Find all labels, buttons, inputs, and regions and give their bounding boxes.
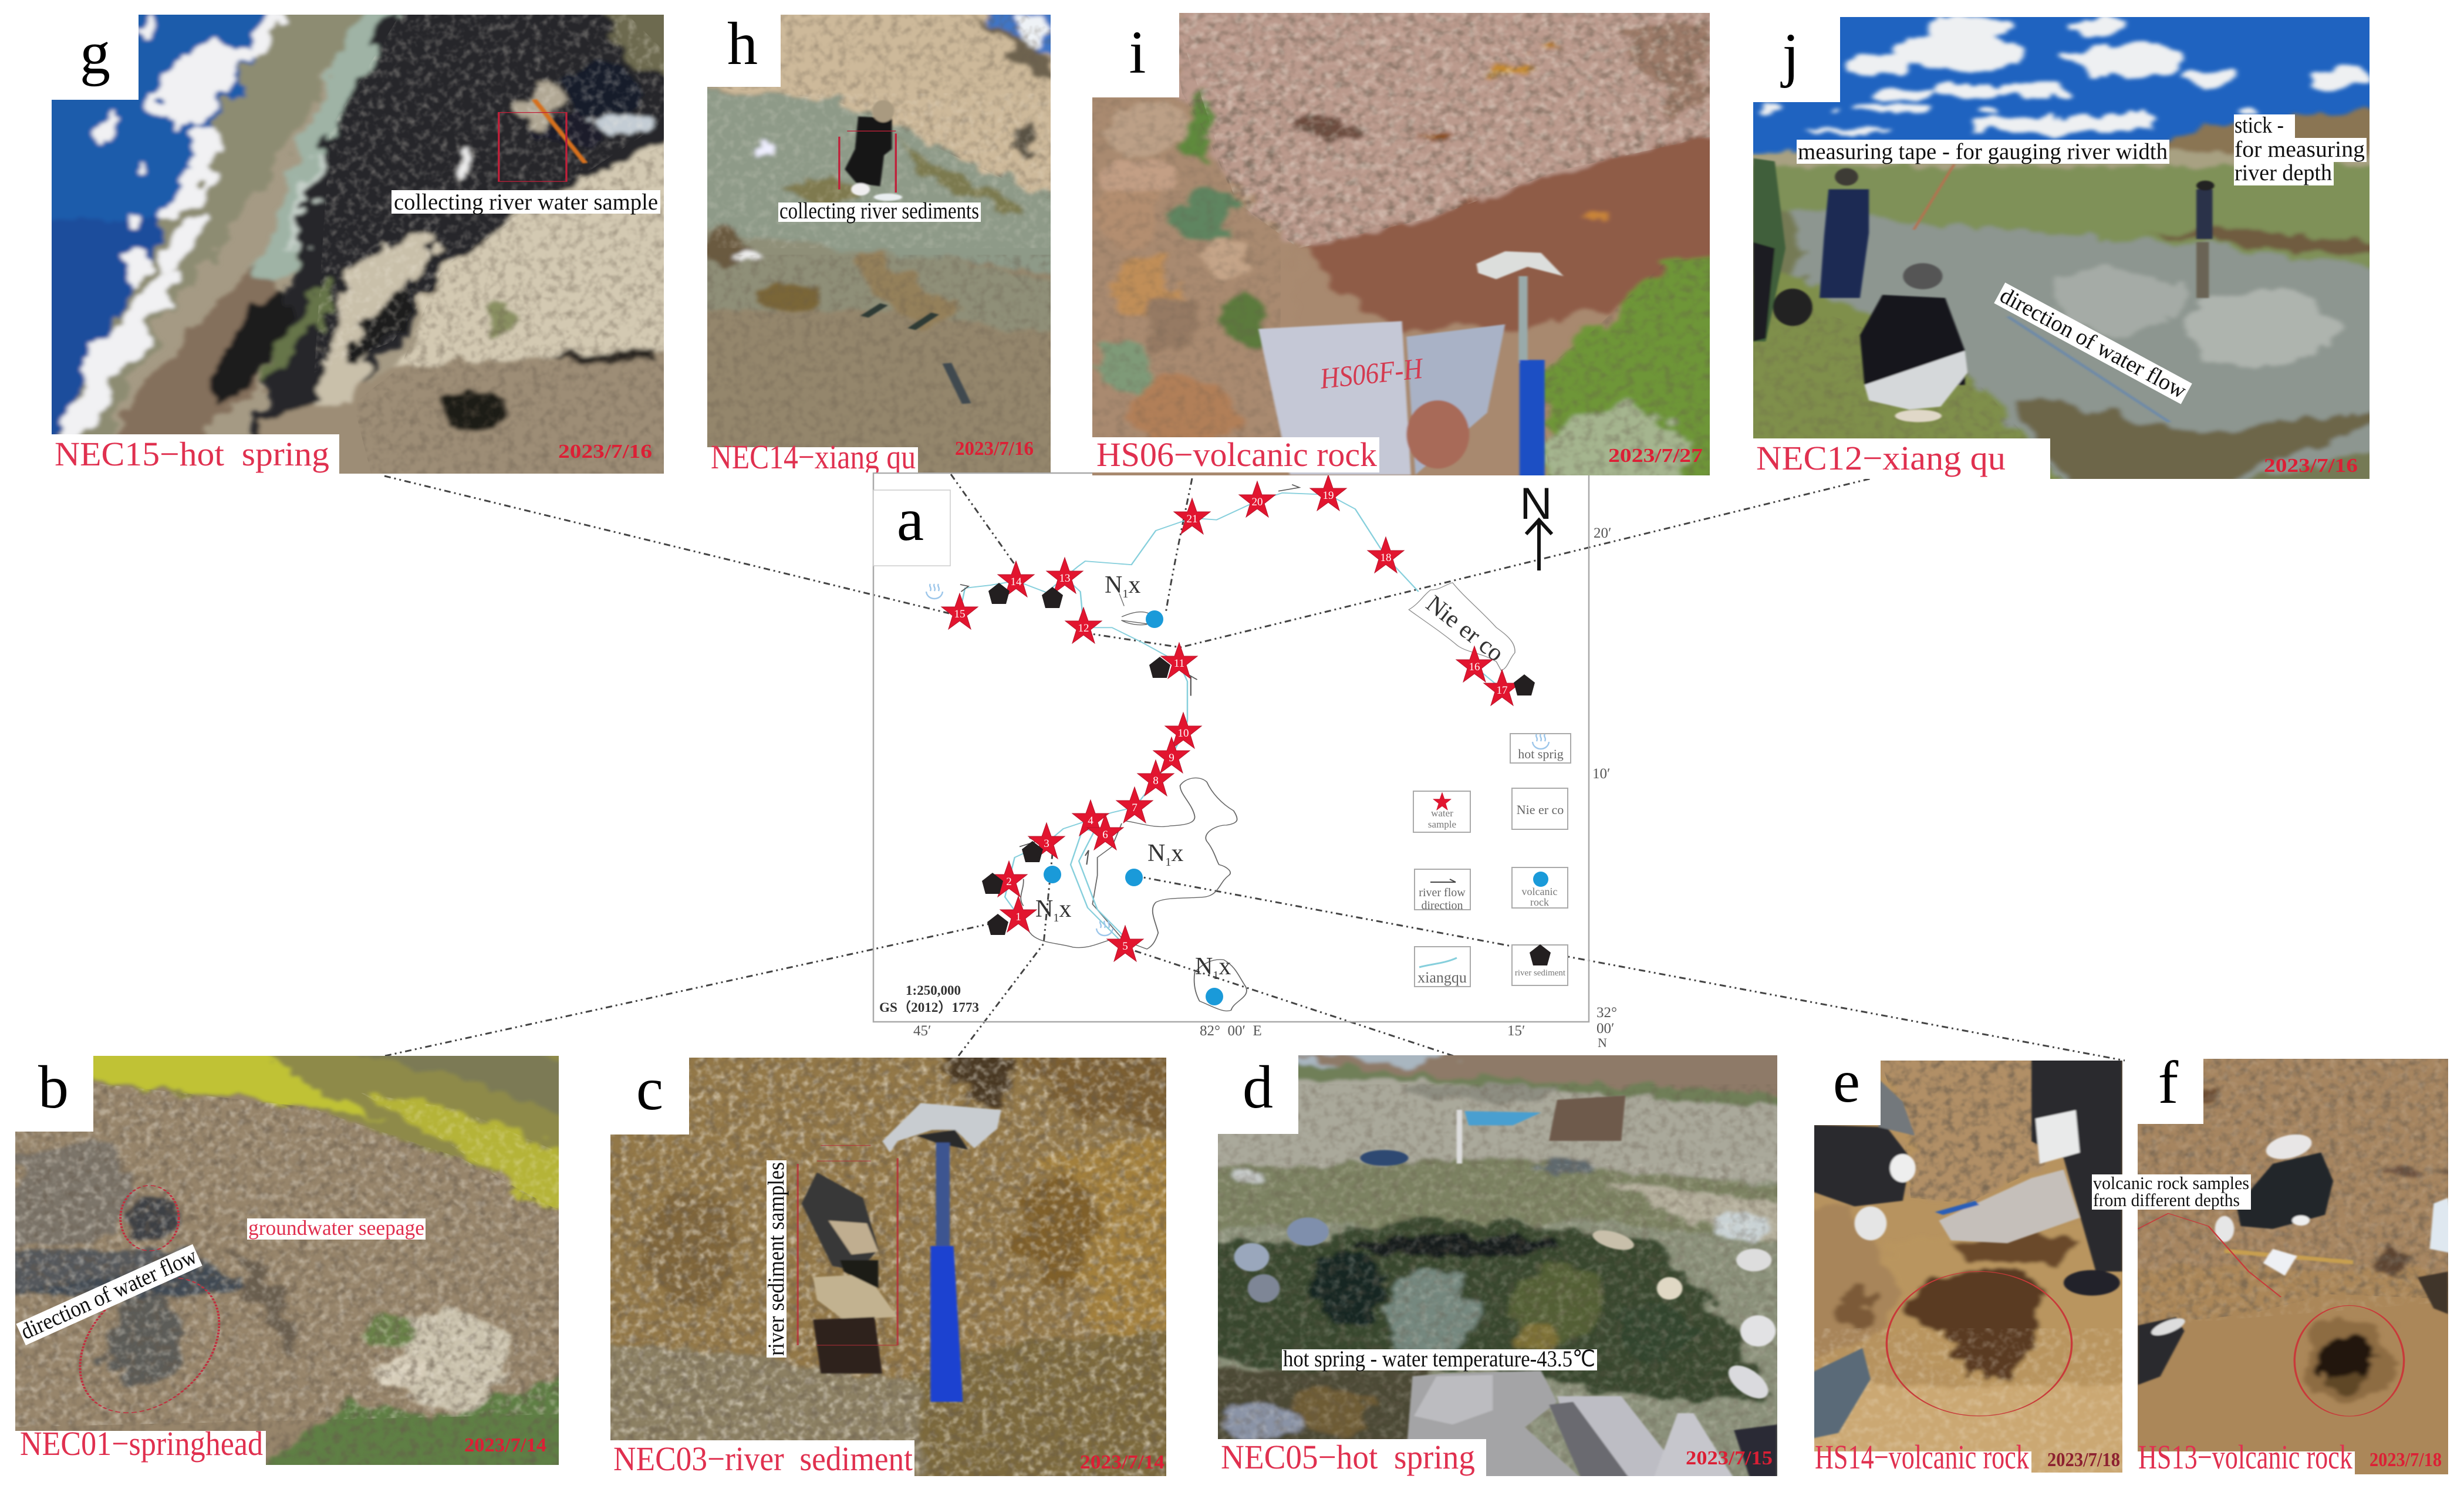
hot spring icons bbox=[926, 584, 1113, 936]
map text: N1x labels: x bbox=[1128, 572, 1140, 599]
photo: sampler beside dug pit bbox=[2104, 1039, 2464, 1487]
map text: N1x labels: N bbox=[1147, 840, 1165, 867]
legend: river sediment: river sediment bbox=[1515, 968, 1566, 978]
panel g: NEC15 hot spring photo bbox=[52, 15, 664, 474]
hammer bbox=[882, 1103, 1001, 1402]
sampling sites: water sample stars: 14 bbox=[1011, 576, 1022, 588]
sampling sites: water sample stars: 3 bbox=[1044, 838, 1049, 850]
sampling sites: water sample stars: 16 bbox=[1469, 661, 1480, 673]
legend: lake bbox=[1512, 788, 1568, 829]
river flow arrows bbox=[960, 485, 1299, 865]
map frame bbox=[873, 473, 1589, 1022]
legend: water sample: water bbox=[1431, 808, 1453, 819]
sampling sites: water sample stars: 18 bbox=[1380, 552, 1391, 564]
caption: HS06−volcanic rock bbox=[1096, 435, 1377, 474]
photo: people measuring river under blue sky bbox=[1753, 17, 2370, 479]
tent, flags and rocks bbox=[1234, 1096, 1777, 1478]
people bbox=[1753, 158, 2215, 422]
note: collecting river sediments: collecting river sediments bbox=[779, 198, 979, 224]
note: volcanic rock samples from different depths bbox=[2092, 1174, 2251, 1210]
legend: river sediment bbox=[1512, 944, 1568, 985]
legend: hot spring bbox=[1510, 734, 1571, 763]
map text: N1x labels: 1 bbox=[1122, 588, 1128, 600]
panel letter i bbox=[1092, 13, 1179, 97]
legend: volcanic rock bbox=[1512, 867, 1568, 908]
date: 2023/7/16 bbox=[955, 438, 1034, 460]
caption: NEC15−hot spring bbox=[55, 435, 329, 473]
lake label: Nie er co bbox=[1421, 590, 1508, 667]
north arrow bbox=[1520, 479, 1552, 570]
panel letter a bbox=[873, 486, 950, 566]
sampling sites: water sample stars: 19 bbox=[1323, 489, 1334, 502]
sampling sites: water sample stars: 13 bbox=[1059, 572, 1071, 585]
geology outlines and lake bbox=[1021, 583, 1515, 1011]
bags and hammer bbox=[1258, 251, 1564, 478]
note: measuring tape: measuring tape - for gauging river width bbox=[1798, 139, 2168, 164]
sampling sites: water sample stars: 9 bbox=[1169, 752, 1174, 764]
panel letter c bbox=[610, 1055, 689, 1135]
sampling sites: water sample stars: 10 bbox=[1177, 727, 1189, 740]
sediment sample rocks bbox=[802, 1173, 897, 1373]
handwritten bag label: HS06F-H bbox=[1318, 352, 1426, 395]
date: 2023/7/27 bbox=[1608, 445, 1703, 467]
note: river sediment samples: river sediment samples bbox=[764, 1162, 789, 1356]
legend: volcanic rock: volcanic bbox=[1522, 886, 1557, 897]
panel letter d: d bbox=[1243, 1055, 1273, 1121]
panel letter e bbox=[1814, 1048, 1881, 1125]
date: 2023/7/16 bbox=[558, 441, 652, 462]
legend: volcanic rock: rock bbox=[1530, 896, 1549, 908]
photo: seepage on gravel with yellow flowers bbox=[0, 1033, 606, 1476]
panel j: NEC12 xiang qu photo bbox=[1753, 17, 2370, 479]
map text: N1x labels: x bbox=[1171, 840, 1183, 867]
legend: water sample: sample bbox=[1428, 819, 1456, 830]
sampling sites: water sample stars: 6 bbox=[1102, 829, 1108, 841]
coordinate labels: 32° bbox=[1596, 1005, 1617, 1021]
legend: water sample bbox=[1413, 791, 1470, 832]
map scale and approval number: 1:250,000 bbox=[906, 983, 961, 998]
legend: lake: Nie er co bbox=[1517, 802, 1564, 817]
note: direction of water flow: direction of water flow bbox=[17, 1243, 201, 1345]
note: stick for measuring river depth: river depth bbox=[2235, 160, 2332, 185]
legend: xiangqu: xiangqu bbox=[1417, 969, 1467, 986]
note: stick for measuring river depth bbox=[2234, 113, 2367, 185]
legend: river flow direction: river flow bbox=[1419, 886, 1466, 899]
sampling sites: water sample stars: 17 bbox=[1497, 684, 1507, 697]
sampling sites: water sample stars bbox=[941, 475, 1520, 961]
panel i: HS06 volcanic rock photo bbox=[1092, 13, 1710, 475]
date: 2023/7/14 bbox=[1080, 1451, 1165, 1473]
people, gloves and bag bbox=[1798, 1056, 2122, 1441]
photo: sediment samples and hammer in shallow water bbox=[583, 1045, 1212, 1487]
sampling sites: water sample stars: 12 bbox=[1078, 622, 1089, 634]
map text: N1x labels: 1 bbox=[1213, 969, 1219, 982]
note: stick for measuring river depth: for measuring bbox=[2235, 137, 2365, 162]
river xiang qu bbox=[960, 493, 1502, 946]
map text: N1x labels: 1 bbox=[1053, 911, 1059, 924]
note: collecting river water sample: collecting river water sample bbox=[394, 190, 658, 215]
photo: person in river with tan slope bbox=[707, 15, 1051, 472]
note: stick for measuring river depth: stick - bbox=[2235, 113, 2284, 138]
panel letter f bbox=[2138, 1049, 2203, 1124]
map text: N1x labels: N bbox=[1035, 896, 1053, 923]
legend: xiangqu bbox=[1415, 947, 1470, 987]
sampler and tools bbox=[2138, 1132, 2458, 1385]
panel e: HS14 volcanic rock photo bbox=[1814, 1061, 2122, 1473]
coordinate labels: 10′ bbox=[1592, 766, 1610, 782]
map text: N1x labels: N bbox=[1105, 572, 1122, 599]
panel letter g bbox=[52, 15, 139, 100]
panel letter j: j bbox=[1781, 21, 1799, 89]
sampling sites: water sample stars: 20 bbox=[1251, 496, 1263, 508]
legend: river flow direction bbox=[1415, 869, 1470, 912]
panel b: NEC01 springhead photo bbox=[15, 1056, 559, 1465]
caption: NEC12−xiang qu bbox=[1756, 439, 2006, 477]
panel d: NEC05 hot spring photo bbox=[1218, 1055, 1777, 1476]
map scale and approval number: GS（2012）1773 bbox=[879, 1000, 979, 1015]
date: 2023/7/14 bbox=[464, 1434, 546, 1456]
map text: N1x labels: 1 bbox=[1165, 856, 1171, 869]
panel letter d bbox=[1218, 1054, 1298, 1134]
panel letter j bbox=[1753, 17, 1840, 102]
sampling sites: water sample stars: 11 bbox=[1174, 657, 1184, 670]
panel letter h bbox=[707, 10, 781, 87]
panel h: NEC14 xiang qu photo bbox=[707, 15, 1051, 472]
sampling sites: water sample stars: 7 bbox=[1132, 802, 1138, 814]
north arrow: N bbox=[1520, 479, 1552, 529]
panel letter i: i bbox=[1129, 19, 1146, 86]
coordinate labels: 20′ bbox=[1594, 525, 1611, 541]
map text: N1x labels: x bbox=[1219, 953, 1231, 980]
note: direction of water flow: direction of water flow bbox=[1996, 282, 2190, 404]
map text: N1x labels bbox=[1035, 572, 1231, 982]
note: groundwater seepage: groundwater seepage bbox=[248, 1216, 424, 1240]
photo: rocky bank with river and sky bbox=[52, 15, 664, 474]
legend: river flow direction: direction bbox=[1421, 899, 1463, 912]
map text: N1x labels: x bbox=[1059, 896, 1071, 923]
sampling sites: water sample stars: 4 bbox=[1088, 815, 1093, 827]
date: 2023/7/15 bbox=[1686, 1447, 1773, 1469]
sampling sites: water sample stars: 1 bbox=[1015, 911, 1021, 923]
caption: NEC01−springhead bbox=[20, 1424, 263, 1463]
date: 2023/7/18 bbox=[2370, 1449, 2442, 1471]
coordinate labels bbox=[913, 525, 1617, 1050]
note: volcanic rock samples from different depths: from different depths bbox=[2093, 1190, 2240, 1210]
sampling sites: water sample stars: 15 bbox=[954, 608, 965, 620]
coordinate labels: 82° 00′ E bbox=[1200, 1023, 1262, 1039]
map text: N1x labels: N bbox=[1195, 953, 1213, 980]
panel f: HS13 volcanic rock photo bbox=[2138, 1059, 2448, 1474]
map scale and approval number bbox=[879, 983, 979, 1015]
coordinate labels: 15′ bbox=[1507, 1023, 1525, 1039]
caption: NEC05−hot spring bbox=[1221, 1438, 1475, 1476]
photo: hot spring pool with tent and rocks bbox=[1187, 1045, 1814, 1487]
sampling sites: water sample stars: 5 bbox=[1122, 940, 1128, 953]
panel c: NEC03 river sediment photo bbox=[610, 1058, 1166, 1476]
sampling sites: water sample stars: 8 bbox=[1153, 775, 1159, 787]
photo: sampling pit with gloved hands and bag bbox=[1782, 1045, 2144, 1481]
legend: hot spring: hot sprig bbox=[1518, 747, 1564, 761]
note: water temperature: hot spring - water temperature-43.5℃ bbox=[1283, 1346, 1595, 1372]
coordinate labels: 45′ bbox=[913, 1023, 931, 1039]
river sediment sites bbox=[982, 583, 1535, 935]
date: 2023/7/16 bbox=[2264, 455, 2358, 477]
coordinate labels: 00′ bbox=[1596, 1021, 1614, 1036]
sampling sites: water sample stars: 2 bbox=[1006, 876, 1012, 888]
person bbox=[845, 100, 967, 404]
panel letter a: a bbox=[897, 486, 924, 553]
volcanic rock sites bbox=[1044, 610, 1223, 1005]
photo: pink boulder, hammer and sample bags bbox=[1092, 13, 1710, 475]
sampling sites: water sample stars: 21 bbox=[1187, 513, 1197, 525]
panel letter b bbox=[15, 1054, 93, 1132]
panel a: sampling map bbox=[872, 472, 1617, 1048]
panel letter g: g bbox=[80, 19, 110, 87]
